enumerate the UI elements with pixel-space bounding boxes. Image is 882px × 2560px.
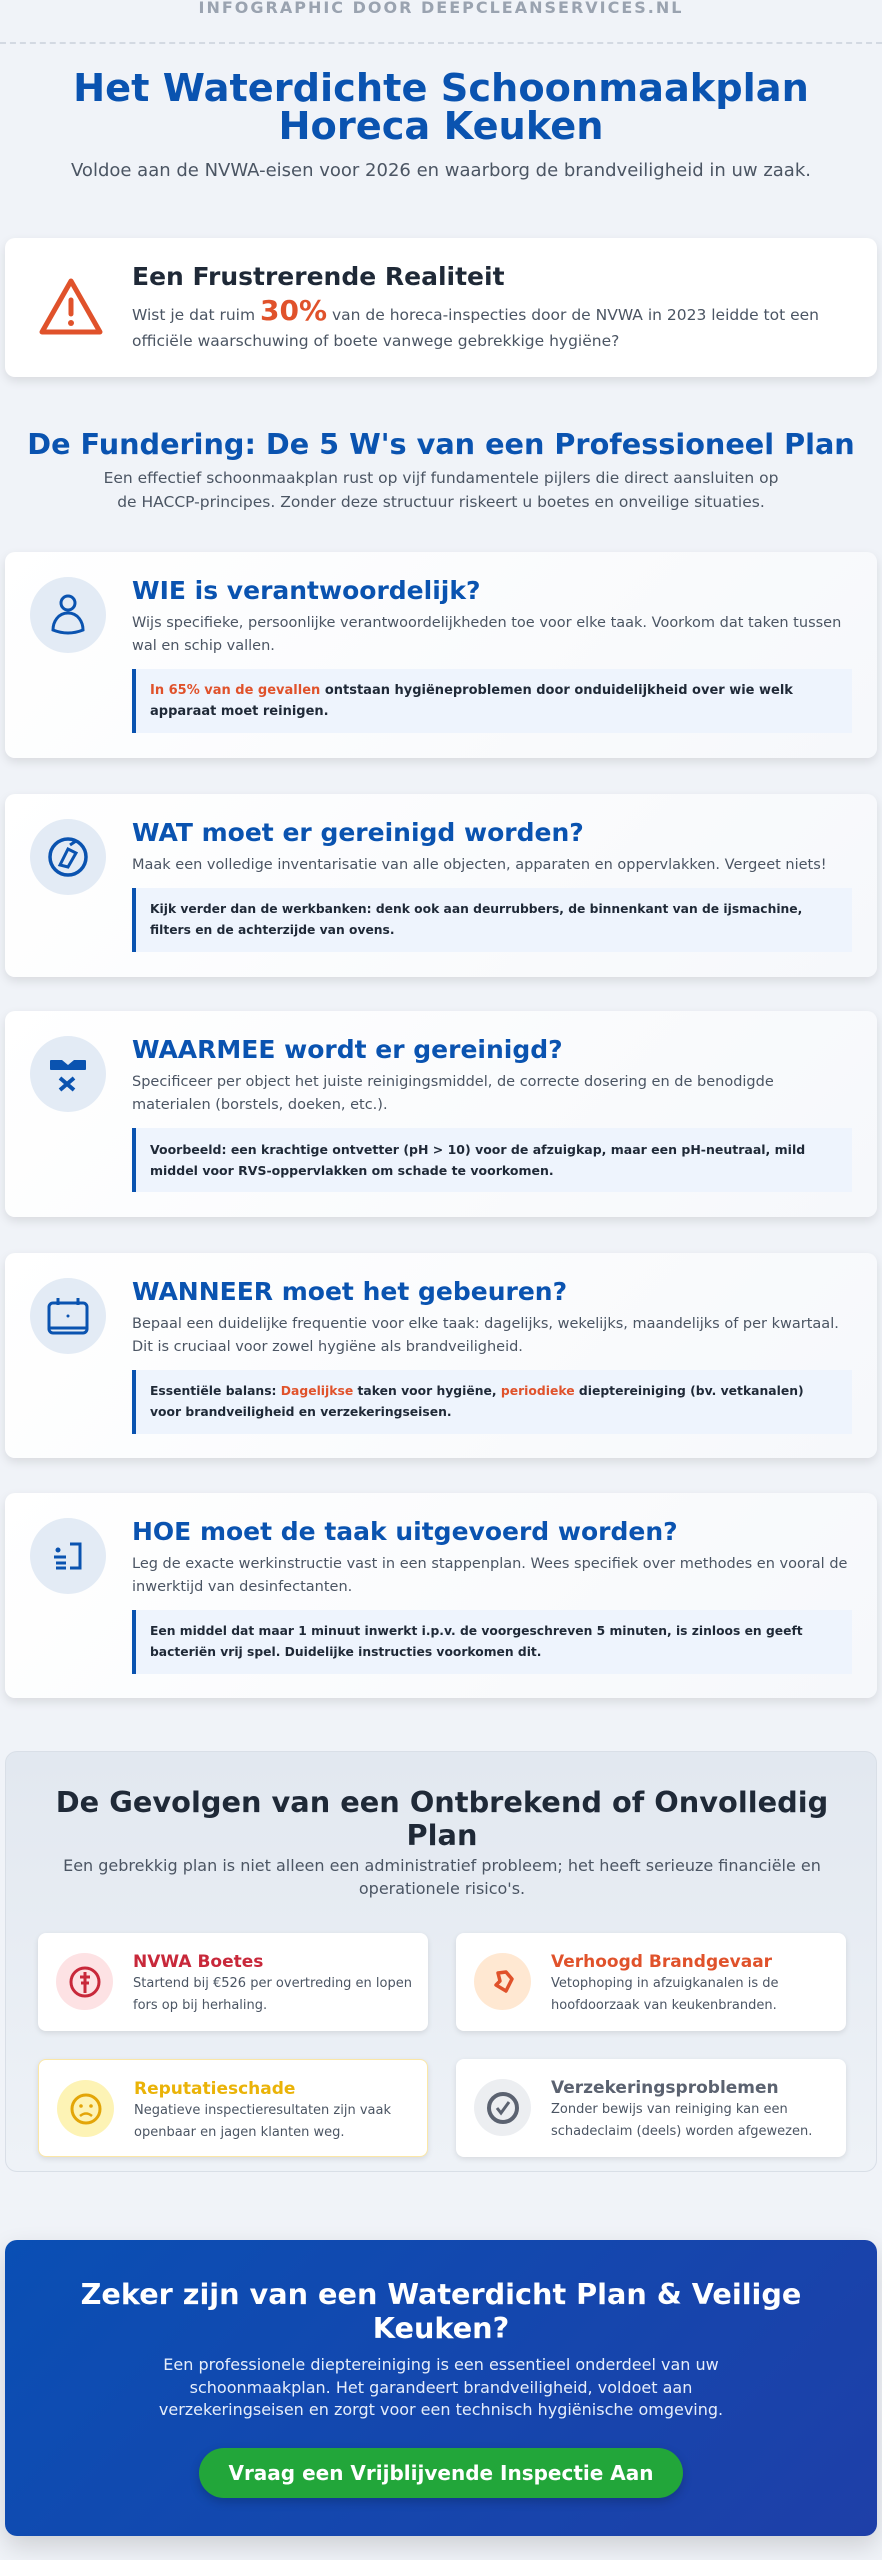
description: Wijs specifieke, persoonlijke verantwoordelijkheden toe voor elke taak. Voorkom dat taken tussen wal en schip vallen. <box>132 615 841 654</box>
panel: WAT <box>5 794 877 977</box>
callout: voor brandveiligheid en verzekeringseisen. <box>150 1405 452 1419</box>
callout: In 65% van de gevallen ontstaan hygiëneproblemen door onduidelijkheid over wie welk apparaat moet reinigen. <box>150 683 793 719</box>
button: Vraag een Vrijblijvende Inspectie Aan <box>228 2461 654 2485</box>
icon: check <box>474 2079 531 2136</box>
icon: fine <box>56 1953 113 2010</box>
callout <box>132 669 852 733</box>
icon: calendar <box>30 1278 106 1354</box>
description: Leg de exacte werkinstructie vast in een stappenplan. Wees specifiek over methodes en vooral de inwerktijd van desinfectanten. <box>132 1556 847 1595</box>
heading <box>81 2277 801 2345</box>
risk: verzekering: Verzekeringsproblemen <box>551 2078 779 2098</box>
description: Bepaal een duidelijke frequentie voor elke taak: dagelijks, wekelijks, maandelijks of per kwartaal. Dit is cruciaal voor zowel hygiëne als brandveiligheid. <box>132 1316 839 1355</box>
risk: reputatieschade: Negatieve inspectieresultaten zijn vaak openbaar en jagen klanten weg. <box>134 2103 391 2140</box>
heading: Zeker zijn van een Waterdicht Plan & Veilige <box>81 2277 801 2311</box>
icon: sad face <box>57 2080 114 2137</box>
heading <box>56 1785 828 1852</box>
section heading: fundering: De Fundering: De 5 W's van een Professioneel Plan <box>27 427 855 461</box>
heading: HOE moet de taak uitgevoerd worden? <box>132 1517 678 1546</box>
risk: reputatieschade: Reputatieschade <box>134 2079 295 2099</box>
heading: WAARMEE wordt er gereinigd? <box>132 1035 563 1064</box>
heading: Een Frustrerende Realiteit <box>132 262 505 291</box>
callout <box>132 1610 852 1674</box>
panel: WIE <box>5 552 877 758</box>
risk: reputatieschade <box>38 2059 428 2157</box>
heading: De Gevolgen van een Ontbrekend of Onvolledig <box>56 1785 828 1819</box>
heading: Plan <box>407 1818 477 1852</box>
icon: spray <box>30 819 106 895</box>
icon: checklist <box>30 1518 106 1594</box>
risk: brandgevaar <box>456 1933 846 2031</box>
icon: warning <box>40 278 102 334</box>
callout <box>132 1128 852 1192</box>
risk: NVWA boetes: NVWA Boetes <box>133 1952 263 1972</box>
callout <box>132 888 852 952</box>
description: Maak een volledige inventarisatie van alle objecten, apparaten en oppervlakken. Vergeet niets! <box>132 857 827 873</box>
heading: WIE is verantwoordelijk? <box>132 576 480 605</box>
callout: Voorbeeld: een krachtige ontvetter (pH > 10) voor de afzuigkap, maar een pH-neutraal, mild middel voor RVS-oppervlakken om schade te voorkomen. <box>150 1142 805 1178</box>
title <box>73 66 809 149</box>
callout: Kijk verder dan de werkbanken: denk ook aan deurrubbers, de binnenkant van de ijsmachine, filters en de achterzijde van ovens. <box>150 902 802 937</box>
description: Specificeer per object het juiste reinigingsmiddel, de correcte dosering en de benodigde materialen (borstels, doeken, etc.). <box>132 1074 774 1113</box>
risk: brandgevaar: Vetophoping in afzuigkanalen is de hoofdoorzaak van keukenbranden. <box>551 1976 779 2013</box>
text: Wist je dat ruim 30% van de horeca-inspecties door de NVWA in 2023 leidde tot een officiële waarschuwing of boete vanwege gebrekkige hygiëne? <box>132 294 819 350</box>
risk: NVWA boetes <box>38 1933 428 2031</box>
heading: WANNEER moet het gebeuren? <box>132 1277 567 1306</box>
panel: WANNEER <box>5 1253 877 1458</box>
button <box>199 2448 683 2498</box>
heading: Keuken? <box>373 2311 509 2345</box>
callout: Een middel dat maar 1 minuut inwerkt i.p.v. de voorgeschreven 5 minuten, is zinloos en geeft bacteriën vrij spel. Duidelijke instructies voorkomen dit. <box>150 1624 803 1659</box>
section subtitle: Een effectief schoonmaakplan rust op vijf fundamentele pijlers die direct aansluiten op de HACCP-principes. Zonder deze structuur riskeert u boetes en onveilige situaties. <box>104 469 778 511</box>
panel: CTA <box>5 2240 877 2536</box>
title: Het Waterdichte Schoonmaakplan <box>73 66 809 111</box>
callout: Essentiële balans: Dagelijkse taken voor hygiëne, periodieke dieptereiniging (bv. vetkanalen) <box>150 1384 804 1398</box>
subtitle: Voldoe aan de NVWA-eisen voor 2026 en waarborg de brandveiligheid in uw zaak. <box>71 160 811 181</box>
panel: WAARMEE <box>5 1011 877 1217</box>
heading: WAT moet er gereinigd worden? <box>132 818 584 847</box>
subtitle: Een gebrekkig plan is niet alleen een administratief probleem; het heeft serieuze financiële en operationele risico's. <box>63 1856 821 1898</box>
risk: brandgevaar: Verhoogd Brandgevaar <box>551 1952 772 1972</box>
risk: verzekering: Zonder bewijs van reiniging kan een schadeclaim (deels) worden afgewezen. <box>551 2102 812 2139</box>
panel: HOE <box>5 1493 877 1698</box>
panel: frustrerende realiteit <box>5 238 877 377</box>
panel: gevolgen <box>5 1751 877 2172</box>
icon: fire <box>474 1953 531 2010</box>
text: Een professionele dieptereiniging is een essentieel onderdeel van uw schoonmaakplan. Het garandeert brandveiligheid, voldoet aan verzekeringseisen en zorgt voor een technisch hygiënische omgeving. <box>159 2355 723 2419</box>
icon: person <box>30 577 106 653</box>
icon: tools <box>30 1036 106 1112</box>
risk: verzekering <box>456 2059 846 2157</box>
risk: NVWA boetes: Startend bij €526 per overtreding en lopen fors op bij herhaling. <box>133 1976 412 2013</box>
title: Horeca Keuken <box>278 104 604 149</box>
callout <box>132 1370 852 1434</box>
